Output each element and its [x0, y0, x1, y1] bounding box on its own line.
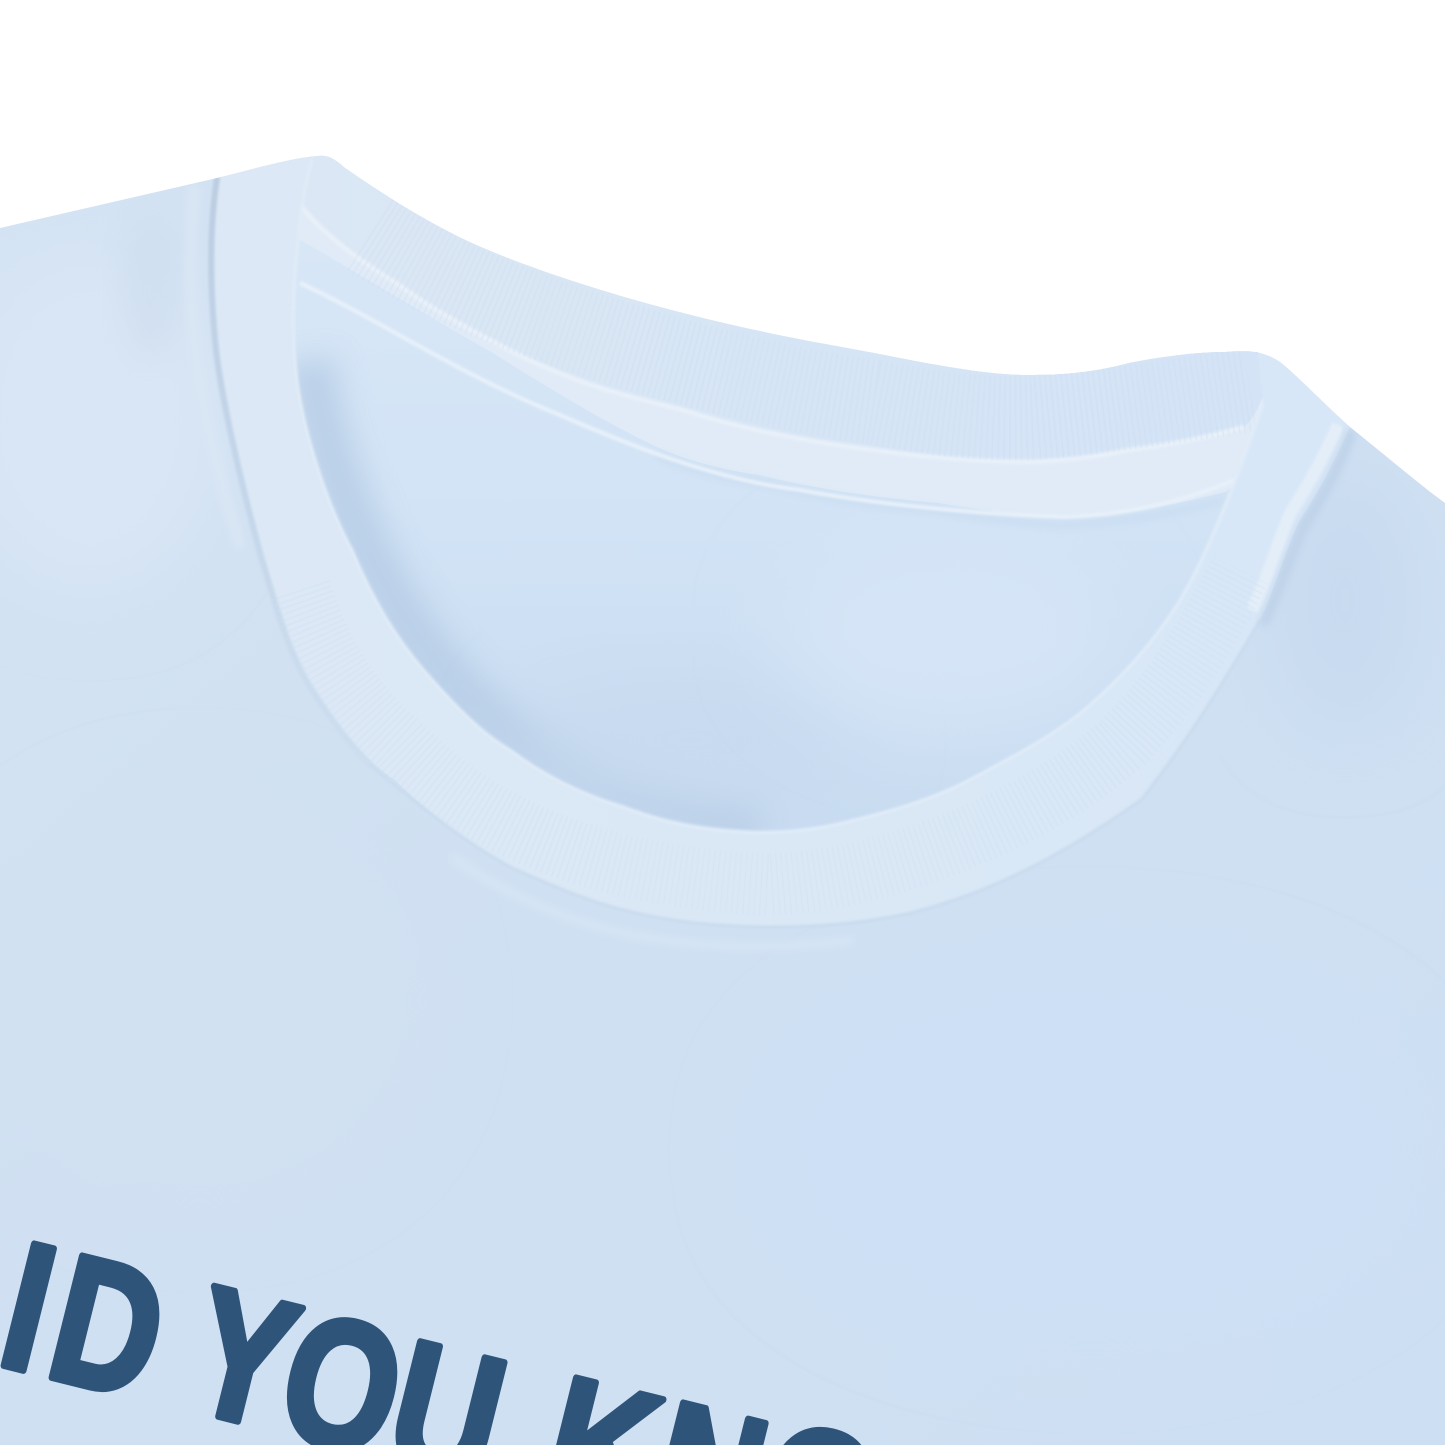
interior shadow [310, 360, 760, 825]
rib edge highlight [300, 205, 1244, 462]
printed text: DID YOU KNOW: D [33, 1215, 184, 1438]
collar front band [191, 140, 1353, 946]
back neck rib [592, 288, 1262, 458]
body stitch highlight [452, 857, 854, 946]
back neck tape [302, 239, 1262, 514]
seam highlight right [1252, 425, 1338, 610]
inside neck opening [293, 130, 1270, 832]
rib texture on band [300, 570, 1240, 885]
inner edge of band [293, 160, 1263, 832]
rib texture [370, 235, 1250, 418]
seam line [370, 620, 1260, 927]
tape stitching [300, 283, 1240, 517]
seam shadow upper left [211, 178, 370, 765]
printed text: DID YOU KNOW [0, 1178, 896, 1445]
seam shadow right [1263, 430, 1353, 625]
tape shadow [657, 455, 1225, 525]
left seam highlight [191, 190, 240, 545]
